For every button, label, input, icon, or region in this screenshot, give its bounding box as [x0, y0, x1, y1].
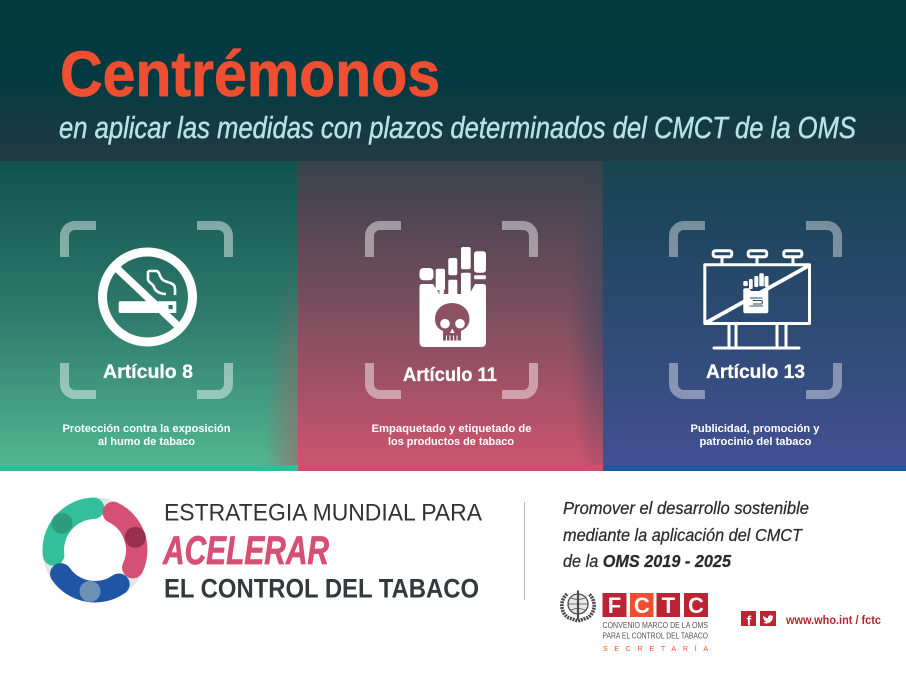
website url: www.who.int / fctc: [785, 615, 882, 627]
icon: no smoking: [102, 252, 192, 342]
description: Empaquetado y etiquetado de: [372, 423, 532, 435]
strategy heading: ACELERAR: [162, 529, 329, 573]
FCTC logo: PARA EL CONTROL DEL TABACO: [602, 632, 708, 640]
description: Protección contra la exposición: [62, 423, 231, 435]
description: [690, 423, 820, 448]
corner brackets: [64, 226, 228, 394]
description: [62, 423, 231, 448]
strategy ring logo: [48, 502, 146, 602]
strategy heading: [162, 500, 482, 604]
social icons: [741, 611, 776, 628]
strategy description: mediante la aplicación del CMCT: [563, 525, 803, 545]
strategy heading: ESTRATEGIA MUNDIAL PARA: [164, 500, 482, 527]
panel: Artículo 11: [298, 161, 603, 471]
FCTC logo: SECRETARÍA: [603, 644, 708, 653]
strategy description: de la OMS 2019 - 2025: [563, 551, 731, 571]
FCTC logo: F: [608, 593, 621, 618]
description: Publicidad, promoción y: [690, 423, 820, 435]
FCTC logo: C: [688, 593, 704, 618]
label: Artículo 11: Artículo 11: [403, 365, 497, 386]
FCTC logo: [602, 593, 708, 653]
panel: Artículo 13: [603, 161, 906, 471]
title: Centrémonos: [60, 38, 440, 110]
description: al humo de tabaco: [98, 436, 195, 448]
label: Artículo 13: Artículo 13: [706, 362, 805, 383]
corner brackets: [674, 226, 838, 394]
icon: WHO emblem: [562, 590, 594, 621]
strategy description: Promover el desarrollo sostenible: [563, 498, 809, 518]
social icons: f: [747, 612, 752, 628]
strategy heading: EL CONTROL DEL TABACO: [164, 574, 479, 604]
icon: billboard: [705, 251, 810, 348]
icon: cigarette pack with skull: [420, 247, 486, 347]
description: [372, 423, 532, 448]
description: los productos de tabaco: [388, 436, 514, 448]
corner brackets: [370, 226, 534, 394]
strategy description: [563, 498, 809, 571]
FCTC logo: C: [634, 593, 650, 618]
description: patrocinio del tabaco: [700, 436, 812, 448]
FCTC logo: CONVENIO MARCO DE LA OMS: [602, 621, 708, 630]
header band: [0, 0, 906, 161]
panel: Artículo 8: [0, 161, 298, 471]
FCTC logo: T: [662, 593, 676, 618]
label: Artículo 8: Artículo 8: [103, 362, 193, 383]
